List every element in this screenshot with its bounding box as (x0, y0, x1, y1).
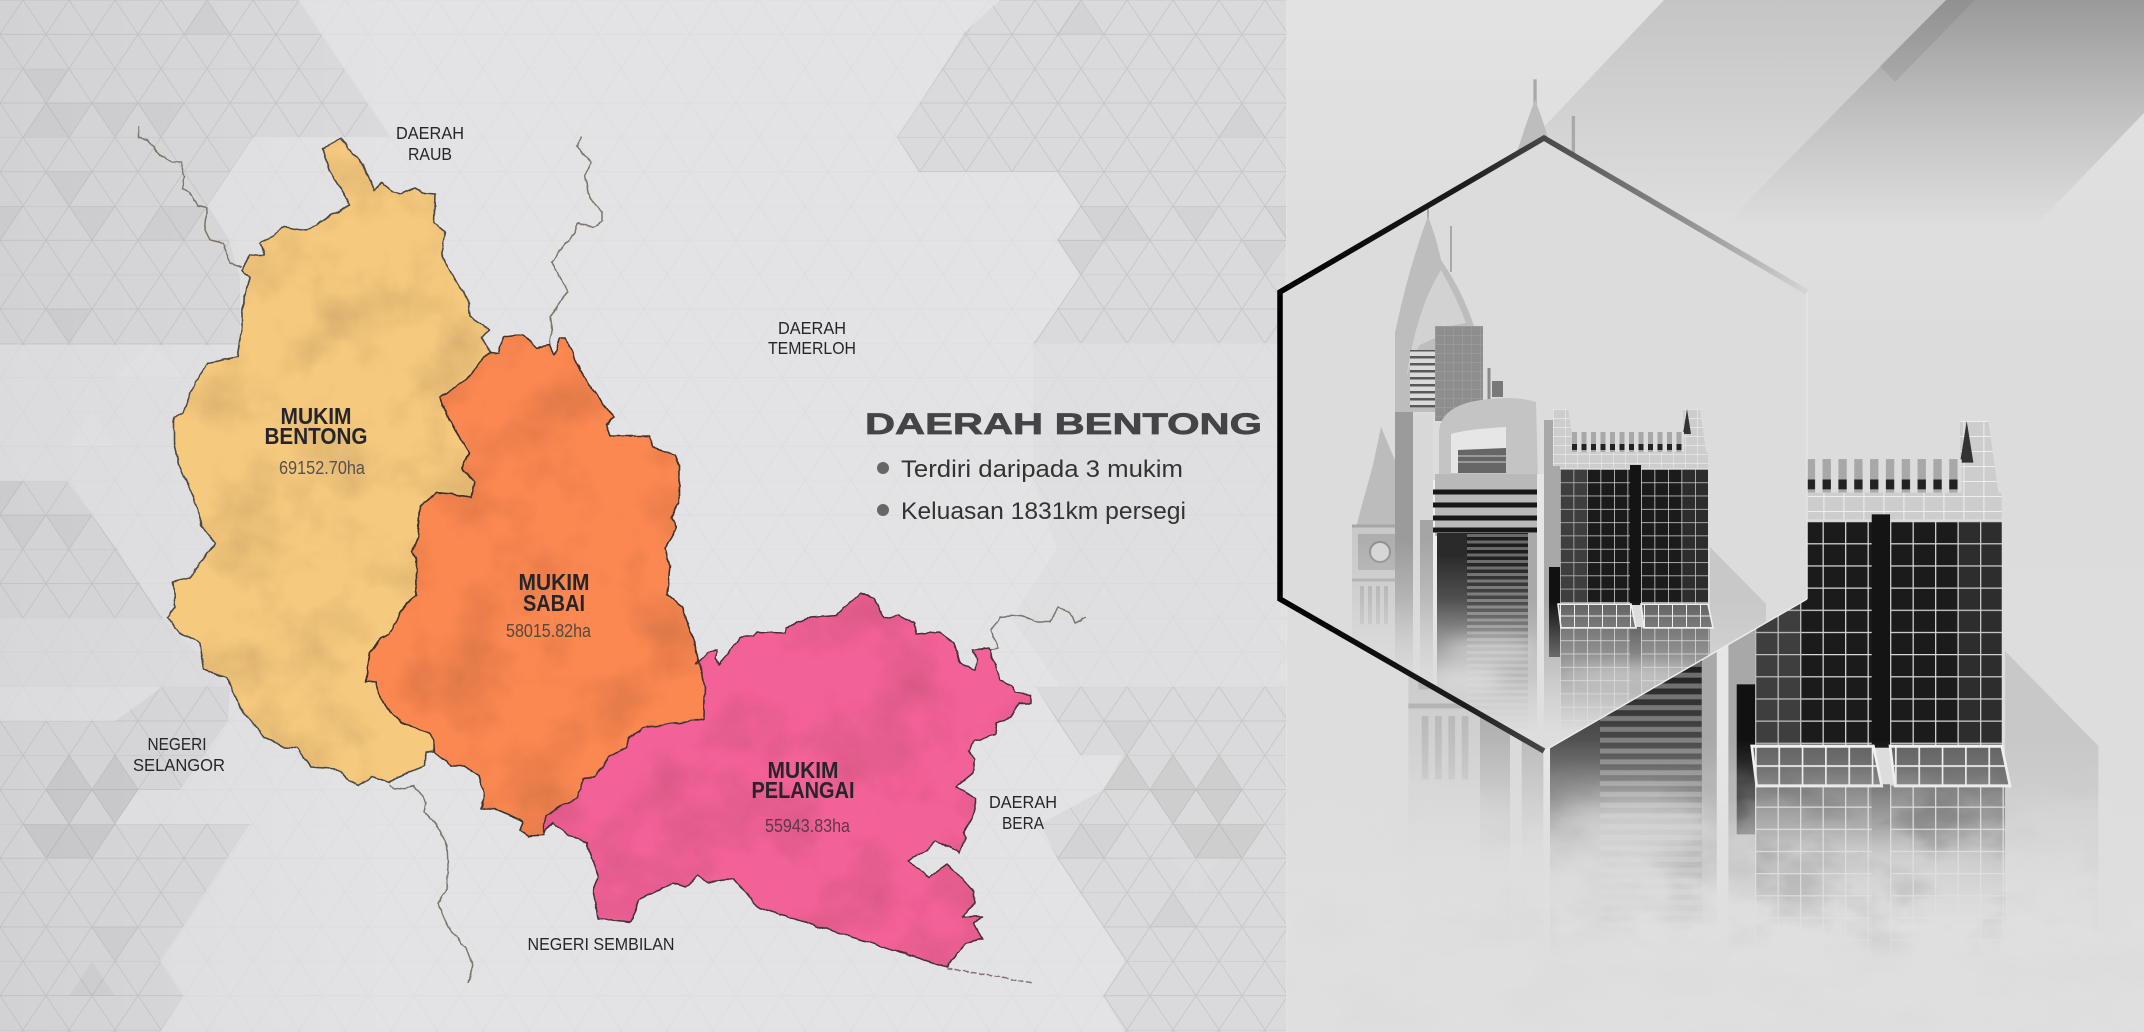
neighbour label: Negeri Selangor (133, 734, 225, 775)
value: Mukim Pelangai area: 55943.83ha (765, 816, 851, 836)
hexagon window with small skyscrapers (1280, 138, 1807, 770)
diagonal band: dark (1722, 0, 2144, 227)
neighbour label: Daerah Temerloh: TEMERLOH (768, 338, 856, 358)
region: Mukim Pelangai (543, 593, 1031, 967)
title: Daerah Bentong: DAERAH BENTONG (865, 408, 1262, 441)
label: Mukim Bentong (264, 403, 368, 449)
region: Mukim Bentong (167, 138, 490, 785)
neighbour label: Daerah Bera: BERA (1002, 813, 1044, 833)
map: Daerah Bentong (133, 123, 1086, 983)
label: Mukim Pelangai: MUKIM (768, 757, 838, 783)
label: Mukim Pelangai: PELANGAI (752, 777, 854, 803)
label: Mukim Sabai: MUKIM (518, 569, 590, 595)
neighbour label: Daerah Temerloh (768, 318, 856, 358)
label: Mukim Pelangai (752, 757, 854, 803)
neighbour label: Negeri Selangor: NEGERI (148, 734, 206, 754)
neighbour label: Daerah Temerloh: DAERAH (778, 318, 846, 338)
bullet: number of mukim: Terdiri daripada 3 mukim (901, 456, 1183, 483)
value: Mukim Bentong area: 69152.70ha (279, 458, 366, 478)
label: Mukim Bentong: MUKIM (280, 403, 352, 429)
panel: foggy skyscraper photo panel (1280, 0, 2144, 1032)
region: Mukim Sabai (366, 335, 705, 836)
neighbour label: Daerah Raub (396, 123, 464, 164)
neighbour label: Daerah Raub: RAUB (408, 144, 452, 164)
diagonal band: light (1541, 0, 1946, 227)
value: Mukim Sabai area: 58015.82ha (506, 621, 592, 641)
bullet: total area: Keluasan 1831km persegi (901, 498, 1186, 525)
panel: triangle mosaic background (0, 0, 1287, 1032)
neighbour label: Daerah Bera (989, 792, 1057, 833)
rolling fog (1550, 769, 2006, 948)
neighbour label: Negeri Sembilan: NEGERI SEMBILAN (528, 934, 674, 954)
label: Mukim Sabai (518, 569, 590, 616)
label: Mukim Sabai: SABAI (523, 590, 585, 616)
large skyscrapers (1408, 79, 2098, 946)
neighbour label: Negeri Selangor: SELANGOR (133, 755, 225, 775)
river lines (138, 126, 1086, 983)
bullet list: district facts (877, 456, 1186, 525)
neighbour label: Daerah Raub: DAERAH (396, 123, 464, 143)
label: Mukim Bentong: BENTONG (264, 423, 368, 449)
neighbour label: Daerah Bera: DAERAH (989, 792, 1057, 812)
